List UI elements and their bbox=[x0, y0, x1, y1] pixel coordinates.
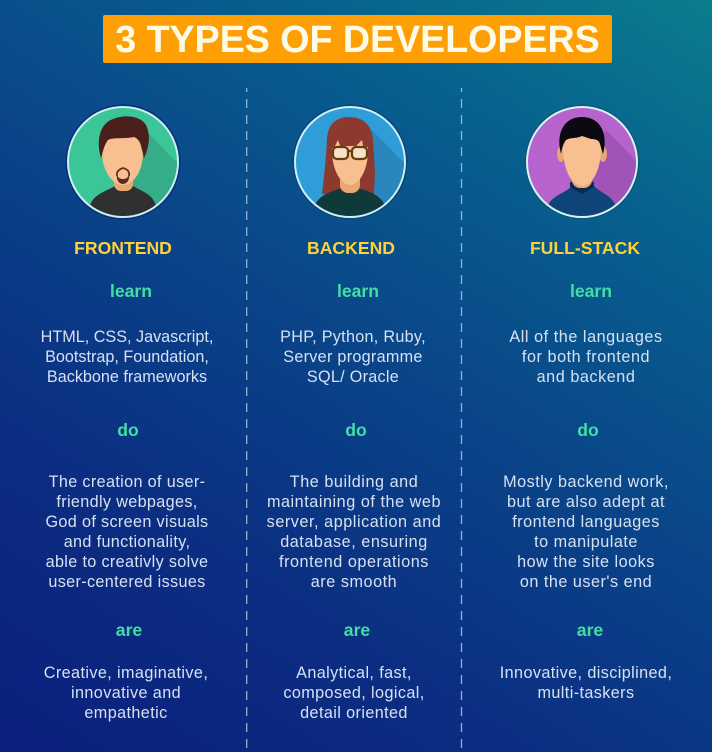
frontend are label: are bbox=[116, 620, 142, 640]
full-stack learn text bbox=[509, 328, 663, 386]
backend learn text bbox=[280, 328, 426, 386]
frontend do text: user-centered issues bbox=[48, 573, 206, 591]
frontend learn text bbox=[41, 328, 213, 386]
full-stack do label: do bbox=[577, 420, 599, 440]
full-stack do text: to manipulate bbox=[534, 533, 638, 551]
full-stack do text: but are also adept at bbox=[507, 493, 665, 511]
full-stack learn text: All of the languages bbox=[509, 328, 663, 346]
frontend learn label: learn bbox=[110, 281, 152, 301]
frontend are text: empathetic bbox=[84, 704, 168, 722]
backend are text: detail oriented bbox=[300, 704, 408, 722]
frontend are text: Creative, imaginative, bbox=[44, 664, 208, 682]
backend are text: Analytical, fast, bbox=[296, 664, 412, 682]
frontend do text: friendly webpages, bbox=[56, 493, 198, 511]
full-stack are text: Innovative, disciplined, bbox=[500, 664, 672, 682]
full-stack column heading: FULL-STACK bbox=[530, 238, 640, 258]
frontend do text: able to creativly solve bbox=[46, 553, 208, 571]
backend are label: are bbox=[344, 620, 370, 640]
full-stack are text bbox=[500, 664, 672, 702]
full-stack do text: Mostly backend work, bbox=[503, 473, 669, 491]
title text: 3 TYPES OF DEVELOPERS bbox=[115, 18, 600, 60]
backend do text: maintaining of the web bbox=[267, 493, 441, 511]
frontend column heading: FRONTEND bbox=[74, 238, 172, 258]
full-stack learn text: for both frontend bbox=[522, 348, 650, 366]
frontend do text: The creation of user- bbox=[49, 473, 205, 491]
frontend learn text: HTML, CSS, Javascript, bbox=[41, 328, 213, 346]
frontend are text bbox=[44, 664, 208, 722]
frontend learn text: Backbone frameworks bbox=[47, 368, 207, 386]
frontend learn text: Bootstrap, Foundation, bbox=[45, 348, 209, 366]
title banner bbox=[103, 15, 612, 63]
full-stack do text bbox=[503, 473, 669, 591]
full-stack learn label: learn bbox=[570, 281, 612, 301]
backend do text: server, application and bbox=[267, 513, 441, 531]
full-stack are label: are bbox=[577, 620, 603, 640]
backend do text: are smooth bbox=[311, 573, 397, 591]
full-stack learn text: and backend bbox=[537, 368, 635, 386]
backend do text: The building and bbox=[290, 473, 418, 491]
frontend are text: innovative and bbox=[71, 684, 181, 702]
backend do text: frontend operations bbox=[279, 553, 429, 571]
frontend do text: and functionality, bbox=[64, 533, 190, 551]
backend learn text: SQL/ Oracle bbox=[307, 368, 399, 386]
frontend do text: God of screen visuals bbox=[45, 513, 208, 531]
icon: full-stack developer avatar bbox=[524, 104, 640, 220]
backend are text: composed, logical, bbox=[283, 684, 425, 702]
backend learn text: Server programme bbox=[283, 348, 423, 366]
backend do text bbox=[267, 473, 441, 591]
full-stack do text: how the site looks bbox=[517, 553, 655, 571]
full-stack are text: multi-taskers bbox=[538, 684, 634, 702]
backend are text bbox=[283, 664, 425, 722]
icon: frontend developer avatar bbox=[66, 104, 180, 220]
frontend do text bbox=[45, 473, 208, 591]
backend column heading: BACKEND bbox=[307, 238, 395, 258]
backend learn text: PHP, Python, Ruby, bbox=[280, 328, 426, 346]
backend learn label: learn bbox=[337, 281, 379, 301]
full-stack do text: on the user's end bbox=[520, 573, 652, 591]
backend do label: do bbox=[345, 420, 367, 440]
backend do text: database, ensuring bbox=[280, 533, 428, 551]
icon: backend developer avatar bbox=[292, 104, 408, 220]
frontend do label: do bbox=[117, 420, 139, 440]
full-stack do text: frontend languages bbox=[512, 513, 660, 531]
